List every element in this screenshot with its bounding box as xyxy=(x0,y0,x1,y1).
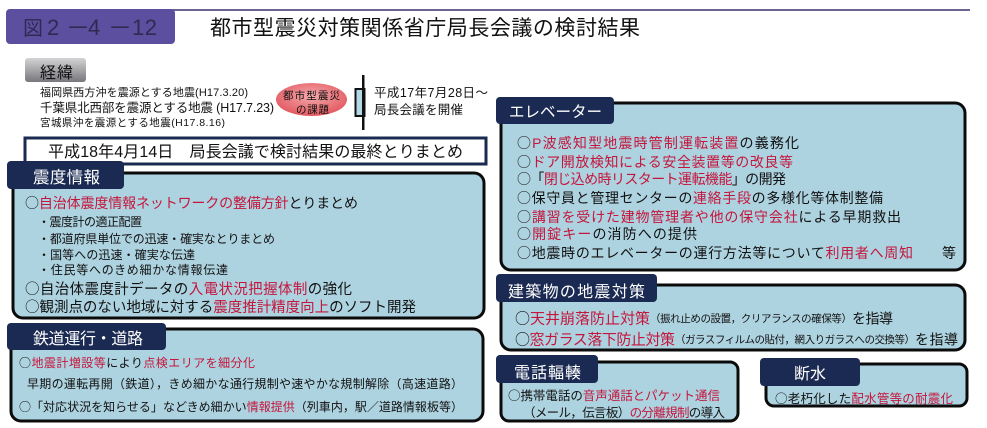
list: エレベーター items: ○保守員と管理センターの連絡手段の多様化等体制整備 xyxy=(517,188,883,208)
tab: 鉄道運行・道路: 鉄道運行・道路 xyxy=(33,330,143,348)
tab: エレベーター: エレベーター xyxy=(509,103,602,121)
list: 建築物の地震対策 items xyxy=(515,308,958,350)
meeting text xyxy=(374,86,488,117)
list: エレベーター items: 等 xyxy=(942,245,956,261)
list: 断水 items: ○老朽化した配水管等の耐震化 xyxy=(775,388,953,407)
list: 鉄道運行・道路 items: ○「対応状況を知らせる」などきめ細かい情報提供（列車内，駅／道路情報板等） xyxy=(19,398,463,415)
heading: 経緯: 経緯 xyxy=(40,64,73,82)
tab: 震度情報: 震度情報 xyxy=(33,168,100,187)
list: 建築物の地震対策 items: ○天井崩落防止対策 xyxy=(515,308,650,328)
oval: 都市型震災の課題: の課題 xyxy=(296,104,330,116)
list: 建築物の地震対策 items: を指導 xyxy=(852,310,893,326)
list: エレベーター items: ○「閉じ込め時リスタート運転機能」の開発 xyxy=(517,169,786,189)
summary banner: 平成18年4月14日 局長会議で検討結果の最終とりまとめ xyxy=(48,143,463,161)
tab: 電話輻輳: 電話輻輳 xyxy=(514,364,581,382)
tab: 断水 xyxy=(760,358,860,386)
list: 鉄道運行・道路 items xyxy=(19,354,463,415)
meeting text: 局長会議を開催 xyxy=(374,103,463,117)
panel: 建築物の地震対策 xyxy=(496,274,965,350)
list: エレベーター items: ○P波感知型地震時管制運転装置の義務化 xyxy=(517,133,799,153)
earthquake list: 千葉県北西部を震源とする地震 (H17.7.23) xyxy=(40,101,274,115)
list: 鉄道運行・道路 items: 早期の運転再開（鉄道），きめ細かな通行規制や速やかな規制解除（高速道路） xyxy=(27,376,463,391)
list: 震度情報 items: ・都道府県単位での迅速・確実なとりまとめ xyxy=(38,231,275,246)
tab: 震度情報 xyxy=(7,161,124,189)
list: 建築物の地震対策 items: （ガラスフィルムの貼付，網入りガラスへの交換等） xyxy=(675,333,915,346)
panel: 鉄道運行・道路 xyxy=(7,323,483,421)
list: 電話輻輳 items xyxy=(508,385,725,420)
figure number badge xyxy=(6,8,175,44)
list: 鉄道運行・道路 items: ○地震計増設等により点検エリアを細分化 xyxy=(19,354,255,371)
oval: 都市型震災の課題 xyxy=(276,83,347,116)
list: エレベーター items: ○開錠キーの消防への提供 xyxy=(517,224,697,244)
figure number badge: 4 xyxy=(88,15,100,40)
figure number badge: 2 xyxy=(47,15,59,40)
earthquake list xyxy=(40,85,274,129)
tab: 建築物の地震対策: 建築物の地震対策 xyxy=(508,283,645,301)
list: 震度情報 items: ・住民等へのきめ細かな情報伝達 xyxy=(38,262,228,277)
oval: 都市型震災の課題: 都市型震災 xyxy=(283,89,340,102)
figure number badge: － xyxy=(108,8,132,43)
list: エレベーター items xyxy=(517,133,956,263)
earthquake list: 宮城県沖を震源とする地震(H17.8.16) xyxy=(40,116,225,129)
panel: エレベーター xyxy=(496,97,965,270)
panel: 電話輻輳 xyxy=(496,355,738,421)
title: 都市型震災対策関係省庁局長会議の検討結果 xyxy=(210,17,640,40)
list: 震度情報 items: ・震度計の適正配置 xyxy=(38,214,142,229)
list: 震度情報 items: ○自治体震度情報ネットワークの整備方針とりまとめ xyxy=(25,193,358,213)
list: 建築物の地震対策 items: （振れ止めの設置，クリアランスの確保等） xyxy=(650,312,852,325)
list: 震度情報 items: ○自治体震度計データの入電状況把握体制の強化 xyxy=(25,278,352,299)
list: エレベーター items: ○地震時のエレベーターの運行方法等について利用者へ周知 xyxy=(517,243,913,263)
figure number badge: 図 xyxy=(23,18,43,40)
figure number badge: － xyxy=(66,8,90,43)
panel: 震度情報 xyxy=(7,161,484,318)
list: エレベーター items: ○講習を受けた建物管理者や他の保守会社による早期救出 xyxy=(517,207,901,227)
tab: 断水: 断水 xyxy=(794,365,826,383)
list: 震度情報 items: ・国等への迅速・確実な伝達 xyxy=(38,247,195,262)
tab: エレベーター xyxy=(496,97,614,124)
list: 震度情報 items: ○観測点のない地域に対する震度推計精度向上のソフト開発 xyxy=(25,296,416,317)
tab: 電話輻輳 xyxy=(496,355,598,383)
tab: 建築物の地震対策 xyxy=(496,274,657,302)
list: 建築物の地震対策 items: ○窓ガラス落下防止対策 xyxy=(515,328,675,350)
meeting text: 平成17年7月28日～ xyxy=(374,86,488,100)
header xyxy=(6,8,970,44)
list: 電話輻輳 items: ○携帯電話の音声通話とパケット通信 xyxy=(508,385,720,404)
heading: 経緯 xyxy=(25,58,86,82)
list: 電話輻輳 items: （メール，伝言板）の分離規制の導入 xyxy=(523,405,725,420)
panel: 断水 xyxy=(760,358,967,407)
list: 震度情報 items xyxy=(25,193,416,317)
earthquake list: 福岡県西方沖を震源とする地震(H17.3.20) xyxy=(40,85,248,99)
bracket marker xyxy=(356,75,364,130)
tab: 鉄道運行・道路 xyxy=(7,323,166,350)
summary banner xyxy=(25,138,486,164)
list: 建築物の地震対策 items: を指導 xyxy=(915,332,958,348)
background section: 経緯 xyxy=(25,58,488,130)
figure number badge: 12 xyxy=(132,15,157,40)
list: エレベーター items: ○ドア開放検知による安全装置等の改良等 xyxy=(517,152,793,172)
